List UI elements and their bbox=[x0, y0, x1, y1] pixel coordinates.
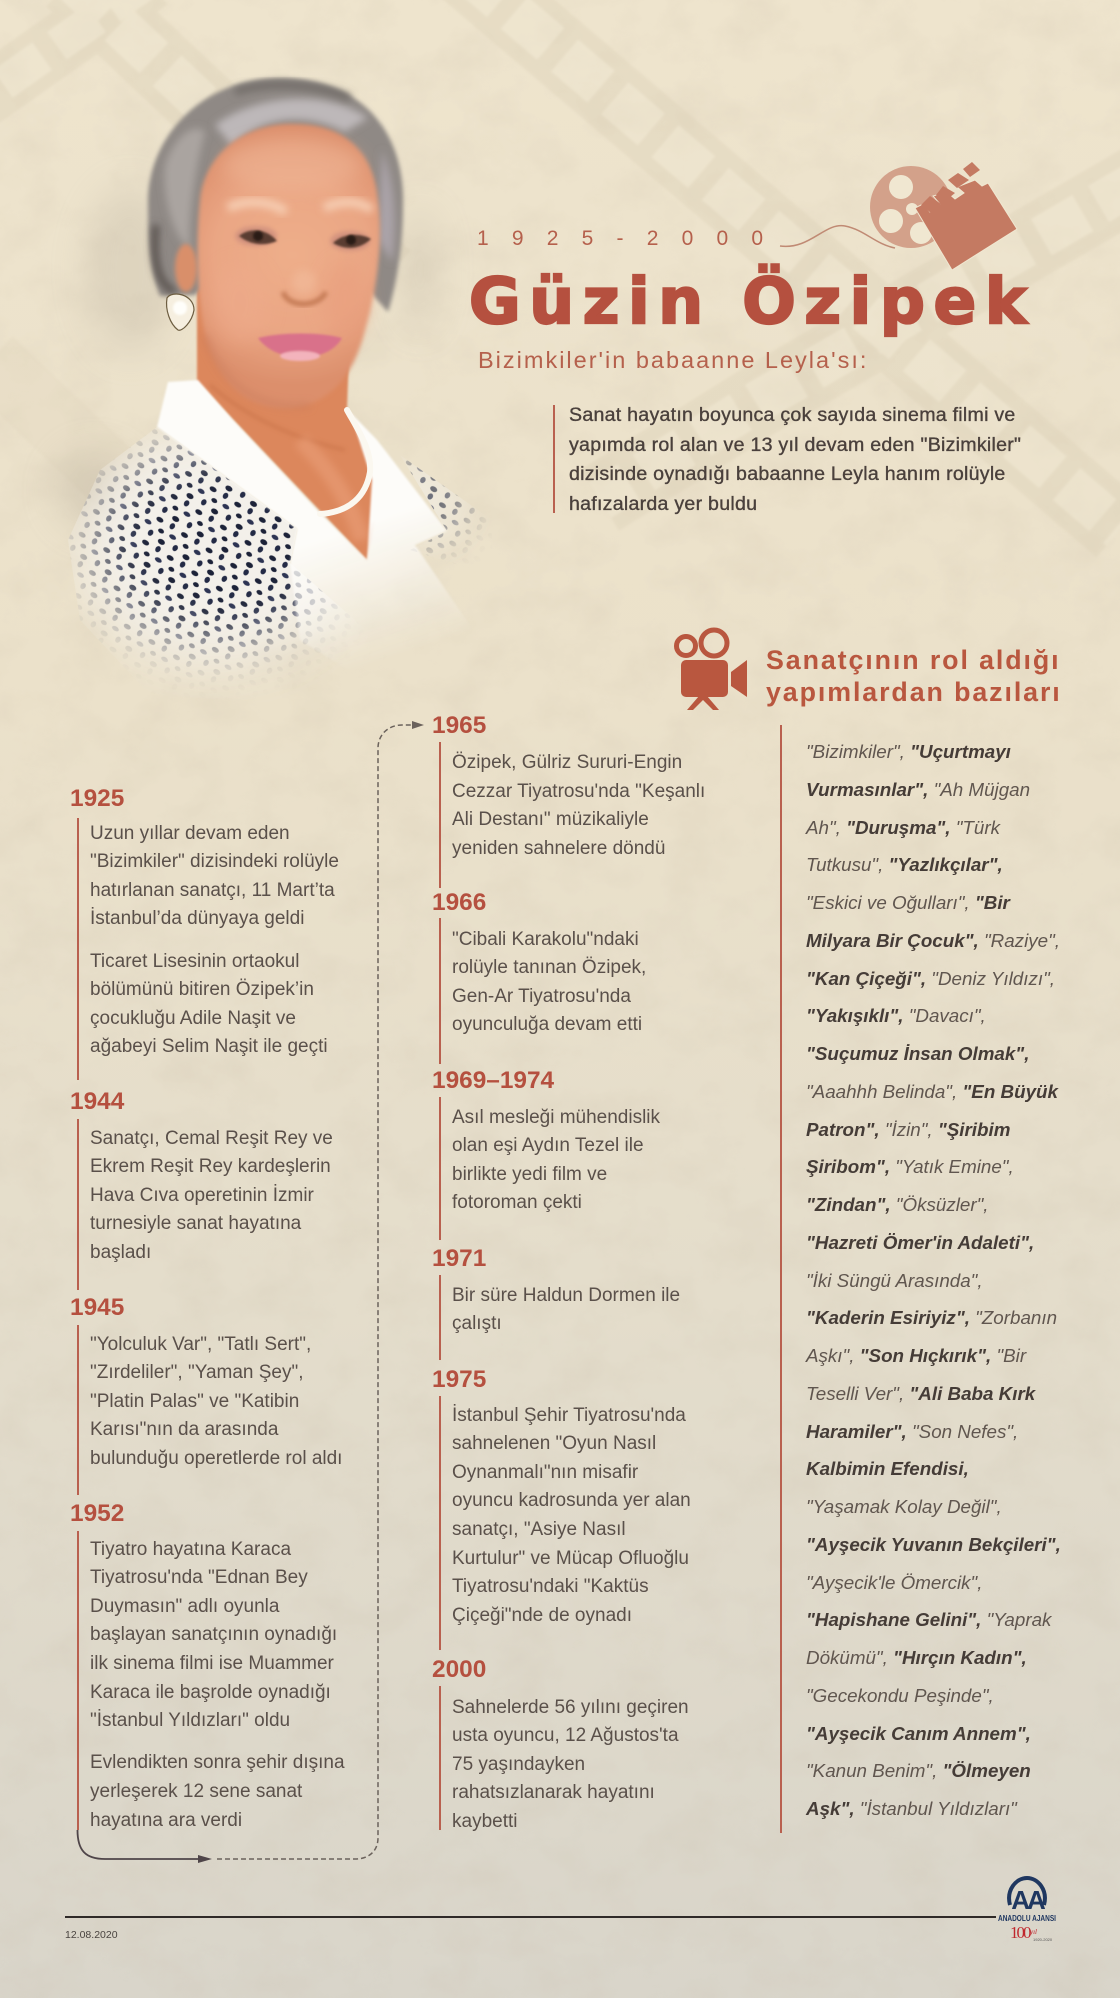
timeline entry: 1925: ağabeyi Selim Naşit ile geçti bbox=[90, 1036, 328, 1057]
list of films: Ah", "Duruşma", "Türk bbox=[806, 816, 1000, 838]
timeline entry: 1925: 1925 bbox=[70, 785, 124, 812]
timeline entry: 1966: Gen-Ar Tiyatrosu'nda bbox=[452, 986, 631, 1007]
timeline entry: 1975: Kurtulur" ve Mücap Ofluoğlu bbox=[452, 1548, 689, 1569]
list of films: "Hazreti Ömer'in Adaleti", bbox=[806, 1232, 1034, 1253]
timeline entry: 1969-1974: Asıl mesleği mühendislik bbox=[452, 1107, 660, 1128]
timeline entry: 1952: Tiyatrosu'nda "Ednan Bey bbox=[90, 1567, 308, 1588]
timeline entry: 1944: başladı bbox=[90, 1242, 151, 1263]
face bbox=[198, 124, 380, 408]
timeline entry: 1969-1974: fotoroman çekti bbox=[452, 1192, 582, 1213]
logo: Anadolu Ajansı: AA bbox=[1011, 1885, 1046, 1915]
lips bbox=[258, 334, 342, 361]
dates: 1925-2000 bbox=[477, 227, 786, 250]
timeline entry: 1945: "Yolculuk Var", "Tatlı Sert", bbox=[90, 1334, 311, 1355]
list of films: Milyara Bir Çocuk", "Raziye", bbox=[806, 930, 1060, 951]
arrow connecting timeline columns bbox=[76, 721, 424, 1863]
timeline entry: 1952: hayatına ara verdi bbox=[90, 1810, 242, 1831]
list of films bbox=[806, 733, 1061, 1828]
list of films: "Kanun Benim", "Ölmeyen bbox=[806, 1760, 1031, 1781]
pearl earring bbox=[167, 294, 194, 330]
timeline entry: 1969-1974 bbox=[432, 1066, 752, 1240]
list of films: "Kan Çiçeği", "Deniz Yıldızı", bbox=[806, 968, 1055, 988]
list of films: "Suçumuz İnsan Olmak", bbox=[806, 1043, 1029, 1064]
timeline entry: 1965: 1965 bbox=[432, 712, 486, 739]
timeline entry: 1925 bbox=[70, 785, 339, 1080]
timeline entry: 1965: Ali Destanı" müzikaliyle bbox=[452, 809, 649, 830]
timeline entry: 2000: Sahnelerde 56 yılını geçiren bbox=[452, 1697, 689, 1718]
timeline entry: 2000: rahatsızlanarak hayatını bbox=[452, 1782, 655, 1803]
timeline entry: 1966: rolüyle tanınan Özipek, bbox=[452, 957, 646, 978]
productions list with rule bbox=[780, 725, 1080, 1833]
list of films: "Ayşecik Canım Annem", bbox=[806, 1722, 1031, 1744]
timeline entry: 1975: sahnelenen "Oyun Nasıl bbox=[452, 1433, 656, 1454]
timeline entry: 1945: "Zırdeliler", "Yaman Şey", bbox=[90, 1362, 304, 1383]
timeline entry: 1952: Tiyatro hayatına Karaca bbox=[90, 1539, 291, 1560]
title: Güzin Özipek bbox=[469, 265, 1035, 338]
timeline entry: 1944: Sanatçı, Cemal Reşit Rey ve bbox=[90, 1128, 333, 1149]
list of films: "İki Süngü Arasında", bbox=[806, 1270, 983, 1290]
logo: Anadolu Ajansı: 1920-2020 bbox=[1033, 1937, 1053, 1942]
timeline entry: 1952 bbox=[70, 1500, 345, 1831]
timeline entry: 1925: Uzun yıllar devam eden bbox=[90, 823, 290, 844]
intro text with rule: yapımda rol alan ve 13 yıl devam eden "Bizimkiler" bbox=[569, 434, 1021, 456]
timeline entry: 1944: Hava Cıva operetinin İzmir bbox=[90, 1185, 314, 1206]
list of films: "Aaahhh Belinda", "En Büyük bbox=[806, 1081, 1058, 1102]
timeline entry: 1944: turnesiyle sanat hayatına bbox=[90, 1213, 301, 1234]
list of films: "Bizimkiler", "Uçurtmayı bbox=[806, 741, 1011, 762]
timeline entry: 1969-1974: olan eşi Aydın Tezel ile bbox=[452, 1135, 644, 1156]
timeline entry: 1945: 1945 bbox=[70, 1294, 124, 1321]
list of films: "Eskici ve Oğulları", "Bir bbox=[806, 892, 1010, 913]
timeline entry: 1966: oyunculuğa devam etti bbox=[452, 1014, 642, 1035]
film reel and clapperboard icon bbox=[780, 162, 1018, 270]
timeline entry: 1975: 1975 bbox=[432, 1366, 486, 1393]
timeline entry: 1965: Özipek, Gülriz Sururi-Engin bbox=[452, 752, 682, 773]
timeline entry: 2000 bbox=[432, 1655, 752, 1830]
timeline entry: 2000: kaybetti bbox=[452, 1811, 517, 1832]
timeline entry: 1975: Tiyatrosu'ndaki "Kaktüs bbox=[452, 1576, 649, 1597]
list of films: "Zindan", "Öksüzler", bbox=[806, 1194, 988, 1215]
timeline entry: 1966: 1966 bbox=[432, 889, 486, 916]
timeline entry: 1945 bbox=[70, 1294, 342, 1495]
wave line bbox=[780, 226, 895, 248]
list of films: Aşk", "İstanbul Yıldızları" bbox=[806, 1798, 1017, 1819]
timeline entry: 1966 bbox=[432, 889, 646, 1064]
timeline entry: 2000: usta oyuncu, 12 Ağustos'ta bbox=[452, 1725, 679, 1746]
eyebrows bbox=[228, 202, 372, 212]
list of films: Patron", "İzin", "Şiribim bbox=[806, 1118, 1010, 1140]
timeline entry: 1925: İstanbul’da dünyaya geldi bbox=[90, 908, 304, 929]
list of films: Şiribom", "Yatık Emine", bbox=[806, 1156, 1014, 1177]
list of films: "Kaderin Esiriyiz", "Zorbanın bbox=[806, 1307, 1057, 1328]
timeline entry: 1966: "Cibali Karakolu"ndaki bbox=[452, 929, 639, 950]
timeline entry: 1944: Ekrem Reşit Rey kardeşlerin bbox=[90, 1156, 331, 1177]
timeline entry: 1971: 1971 bbox=[432, 1245, 486, 1272]
footer rule bbox=[65, 1916, 996, 1918]
timeline entry: 1925: bölümünü bitiren Özipek’in bbox=[90, 979, 314, 1000]
timeline entry: 1952: ilk sinema filmi ise Muammer bbox=[90, 1653, 334, 1674]
logo: Anadolu Ajansı bbox=[990, 1870, 1065, 1945]
timeline entry: 1944: 1944 bbox=[70, 1088, 124, 1115]
timeline entry: 1952: "İstanbul Yıldızları" oldu bbox=[90, 1710, 290, 1731]
list of films: Haramiler", "Son Nefes", bbox=[806, 1420, 1018, 1442]
list of films: Vurmasınlar", "Ah Müjgan bbox=[806, 779, 1030, 800]
list of films: Dökümü", "Hırçın Kadın", bbox=[806, 1647, 1027, 1668]
timeline entry: 2000: 75 yaşındayken bbox=[452, 1754, 585, 1775]
timeline entry: 1952: Evlendikten sonra şehir dışına bbox=[90, 1752, 345, 1773]
intro text with rule: dizisinde oynadığı babaanne Leyla hanım rolüyle bbox=[569, 463, 1006, 485]
portrait of Güzin Özipek bbox=[56, 75, 486, 678]
timeline entry: 1971: Bir süre Haldun Dormen ile bbox=[452, 1285, 680, 1306]
timeline entry: 1969-1974: birlikte yedi film ve bbox=[452, 1164, 607, 1185]
nose bbox=[283, 270, 326, 304]
timeline entry: 1975: oyuncu kadrosunda yer alan bbox=[452, 1490, 691, 1511]
timeline entry: 1965: Cezzar Tiyatrosu'nda "Keşanlı bbox=[452, 781, 705, 802]
neck bbox=[197, 280, 385, 560]
intro text with rule bbox=[553, 405, 1045, 513]
list of films: "Yakışıklı", "Davacı", bbox=[806, 1005, 986, 1026]
list of films: "Ayşecik'le Ömercik", bbox=[806, 1572, 982, 1592]
list of films: Kalbimin Efendisi, bbox=[806, 1458, 969, 1479]
timeline entry: 1925: çocukluğu Adile Naşit ve bbox=[90, 1008, 296, 1029]
icon: movie camera bbox=[674, 628, 747, 710]
timeline entry: 1971: çalıştı bbox=[452, 1313, 502, 1334]
subtitle: Bizimkiler'in babaanne Leyla'sı: bbox=[478, 347, 868, 373]
timeline entry: 1965: yeniden sahnelere döndü bbox=[452, 838, 665, 859]
soft shadow around the figure bbox=[55, 185, 440, 530]
timeline entry: 1925: "Bizimkiler" dizisindeki rolüyle bbox=[90, 851, 339, 872]
list of films: Teselli Ver", "Ali Baba Kırk bbox=[806, 1383, 1035, 1404]
list of films: "Hapishane Gelini", "Yaprak bbox=[806, 1609, 1051, 1630]
list of films: "Yaşamak Kolay Değil", bbox=[806, 1496, 1002, 1517]
timeline entry: 1925: Ticaret Lisesinin ortaokul bbox=[90, 951, 299, 972]
clapperboard bbox=[915, 162, 1017, 270]
ear bbox=[175, 244, 197, 292]
timeline entry: 1945: Karısı"nın da arasında bbox=[90, 1419, 278, 1440]
intro text with rule: Sanat hayatın boyunca çok sayıda sinema filmi ve bbox=[569, 404, 1016, 426]
heading: productions bbox=[766, 645, 1062, 707]
timeline entry: 1971 bbox=[432, 1244, 752, 1360]
timeline entry: 1945: bulunduğu operetlerde rol aldı bbox=[90, 1448, 342, 1469]
timeline entry: 1944 bbox=[70, 1088, 333, 1290]
hair bbox=[148, 78, 403, 312]
white collar bbox=[156, 378, 456, 656]
timeline entry: 2000: 2000 bbox=[432, 1656, 486, 1683]
timeline entry: 1952: Karaca ile başrolde oynadığı bbox=[90, 1682, 331, 1703]
timeline entry: 1975: Oynanmalı"nın misafir bbox=[452, 1462, 638, 1483]
timeline entry: 1975: Çiçeği"nde de oynadı bbox=[452, 1605, 632, 1626]
eyes bbox=[235, 226, 371, 251]
reel bbox=[870, 166, 952, 248]
list of films: "Ayşecik Yuvanın Bekçileri", bbox=[806, 1534, 1061, 1555]
timeline entry: 1969-1974: 1969–1974 bbox=[432, 1067, 554, 1094]
logo: Anadolu Ajansı: yıl bbox=[1029, 1928, 1037, 1936]
heading: productions: Sanatçının rol aldığı bbox=[766, 645, 1061, 675]
timeline entry: 1952: yerleşerek 12 sene sanat bbox=[90, 1781, 302, 1802]
timeline entry: 1925: hatırlanan sanatçı, 11 Mart’ta bbox=[90, 880, 335, 901]
heading: productions: yapımlardan bazıları bbox=[766, 677, 1062, 707]
timeline entry: 1945: "Platin Palas" ve "Katibin bbox=[90, 1391, 299, 1412]
timeline entry: 1952: 1952 bbox=[70, 1500, 124, 1527]
timeline entry: 1952: Duymasın" adlı oyunla bbox=[90, 1596, 279, 1617]
list of films: Aşkı", "Son Hıçkırık", "Bir bbox=[806, 1345, 1026, 1366]
timeline entry: 1952: başlayan sanatçının oynadığı bbox=[90, 1624, 337, 1645]
intro text with rule: hafızalarda yer buldu bbox=[569, 493, 757, 515]
list of films: "Gecekondu Peşinde", bbox=[806, 1685, 994, 1706]
list of films: Tutkusu", "Yazlıkçılar", bbox=[806, 854, 1003, 875]
timeline entry: 1975: sanatçı, "Asiye Nasıl bbox=[452, 1519, 626, 1540]
pearl necklace bbox=[320, 410, 370, 514]
logo: Anadolu Ajansı: 100 bbox=[1010, 1923, 1031, 1942]
timeline entry: 1975 bbox=[432, 1365, 752, 1650]
jacket with dot pattern bbox=[68, 428, 486, 678]
timeline entry: 1965 bbox=[432, 712, 705, 888]
timeline entry: 1975: İstanbul Şehir Tiyatrosu'nda bbox=[452, 1405, 686, 1426]
date: 12.08.2020 bbox=[65, 1929, 118, 1941]
